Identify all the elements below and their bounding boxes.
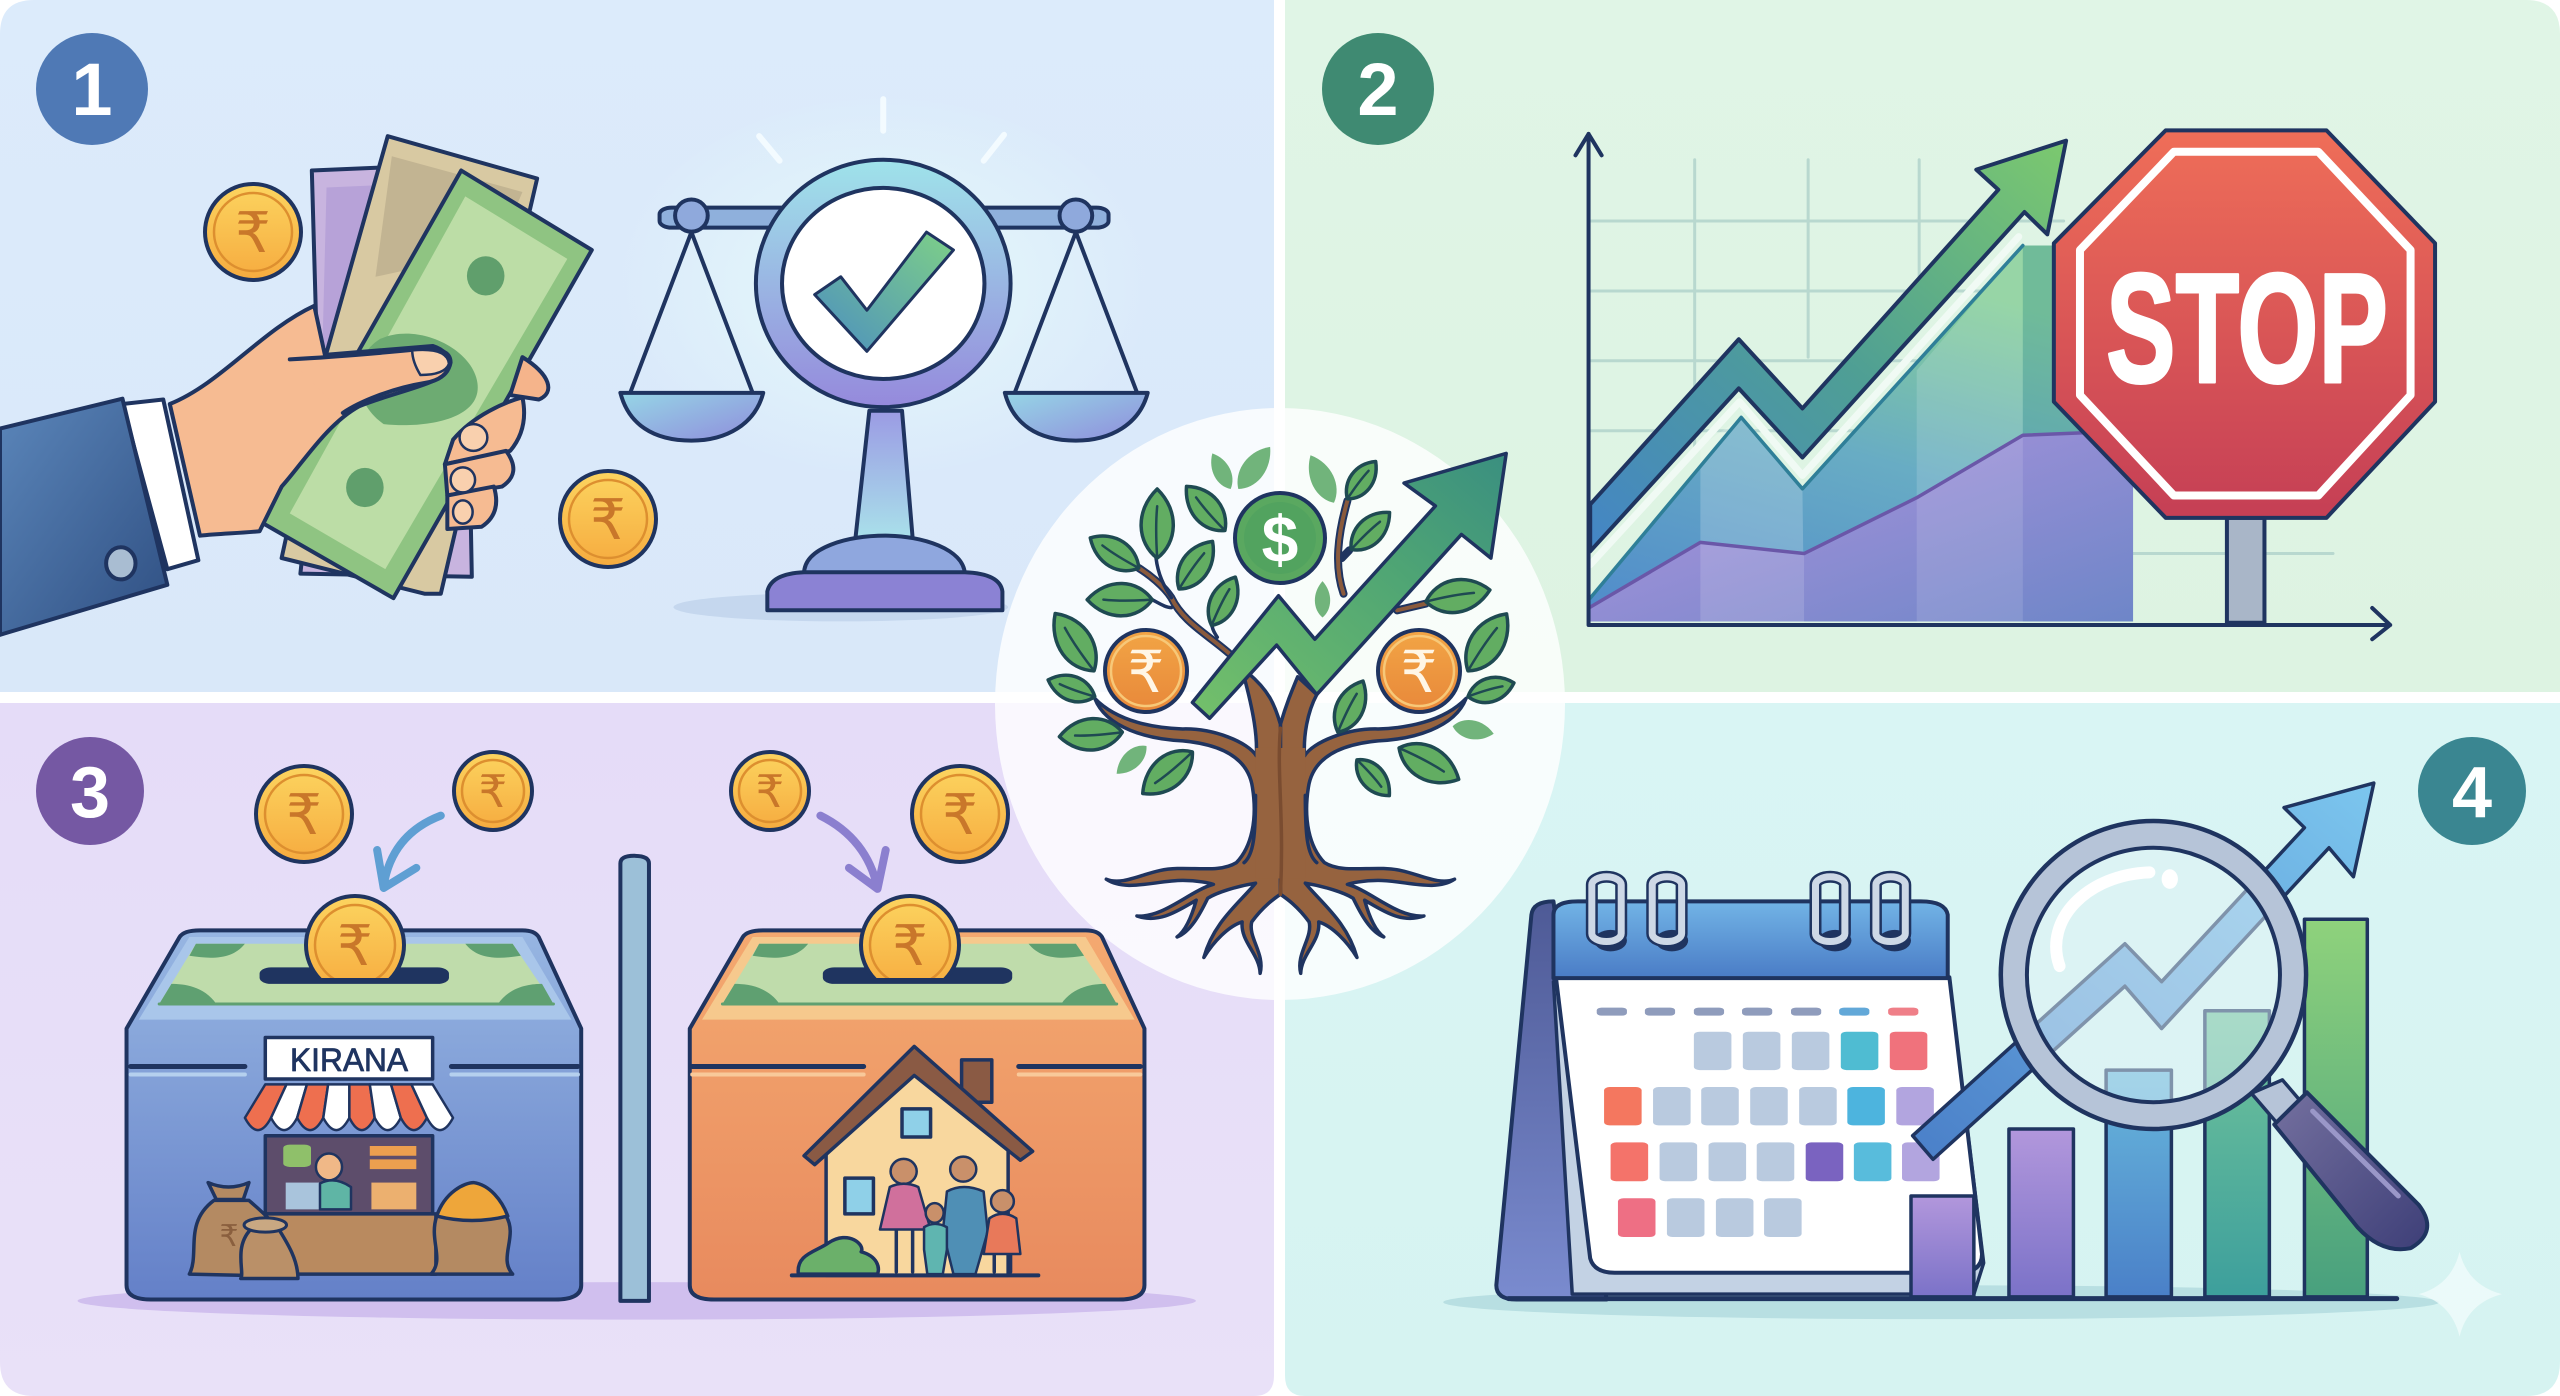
number badge 2 bbox=[1322, 33, 1434, 145]
icon: coin top left bbox=[205, 184, 301, 280]
coins above right box: ₹ bbox=[942, 783, 978, 848]
icon: hand holding banknotes bbox=[0, 136, 592, 635]
panel 2 illustration: rising chart and stop sign bbox=[1322, 33, 2435, 639]
number badge 2: 2 bbox=[1357, 48, 1399, 131]
stop sign bbox=[2054, 130, 2435, 623]
bar chart with arrow bbox=[1509, 783, 2397, 1299]
number badge 1: 1 bbox=[71, 48, 113, 131]
number badge 4: 4 bbox=[2452, 753, 2492, 833]
number badge 3 bbox=[36, 737, 144, 845]
icon: coin bottom: ₹ bbox=[590, 488, 626, 553]
tree trunk, roots and branches bbox=[1095, 501, 1466, 973]
left rupee coin: ₹ bbox=[1128, 638, 1164, 706]
panel 3 illustration: two separate savings boxes bbox=[36, 737, 1196, 1320]
tree leaves bbox=[1042, 440, 1520, 806]
right rupee coin bbox=[1378, 630, 1460, 712]
arrow to right box bbox=[820, 816, 886, 889]
left box: kirana shop: KIRANA bbox=[290, 1042, 409, 1078]
panel 1 background bbox=[0, 0, 1274, 692]
arrow to left box bbox=[377, 816, 441, 888]
left box: kirana shop: ₹ bbox=[219, 1219, 239, 1254]
panel 1 illustration: hand with cash and balanced scale bbox=[0, 33, 1153, 635]
number badge 3: 3 bbox=[70, 753, 110, 833]
center emblem: money tree with growth arrow bbox=[1042, 440, 1520, 973]
left box: kirana shop: ₹ bbox=[337, 914, 373, 979]
icon: balance scale with check mark bbox=[614, 94, 1153, 621]
stop sign: STOP bbox=[2106, 242, 2388, 416]
icon: coin bottom bbox=[560, 471, 656, 567]
icon: magnifying glass bbox=[2001, 821, 2427, 1249]
dollar coin: $ bbox=[1262, 502, 1298, 576]
calendar bbox=[1443, 877, 2439, 1319]
panel 2 background bbox=[1285, 0, 2560, 692]
sparkle bbox=[2419, 1252, 2502, 1337]
right rupee coin: ₹ bbox=[1401, 638, 1437, 706]
number badge 1 bbox=[36, 33, 148, 145]
right box: home and family bbox=[690, 896, 1144, 1300]
coins above right box: ₹ bbox=[756, 765, 784, 818]
center circle backdrop bbox=[995, 408, 1565, 1000]
area chart with rising arrow bbox=[1576, 134, 2390, 639]
right box: home and family: ₹ bbox=[892, 914, 928, 979]
panel 4 background bbox=[1285, 703, 2560, 1396]
number badge 4 bbox=[2418, 737, 2526, 845]
dollar coin bbox=[1235, 493, 1325, 583]
shadow and divider bbox=[78, 856, 1196, 1320]
panel 3 background bbox=[0, 703, 1274, 1396]
growth arrow on tree bbox=[1192, 453, 1506, 718]
coins above left box: ₹ bbox=[479, 765, 507, 818]
left box: kirana shop bbox=[127, 896, 581, 1300]
coins above right box bbox=[731, 752, 1008, 862]
panel 4 illustration: calendar, bars and magnifier bbox=[1443, 737, 2526, 1337]
left rupee coin bbox=[1105, 630, 1187, 712]
coins above left box bbox=[256, 752, 532, 862]
icon: coin top left: ₹ bbox=[235, 201, 271, 266]
coins above left box: ₹ bbox=[286, 783, 322, 848]
